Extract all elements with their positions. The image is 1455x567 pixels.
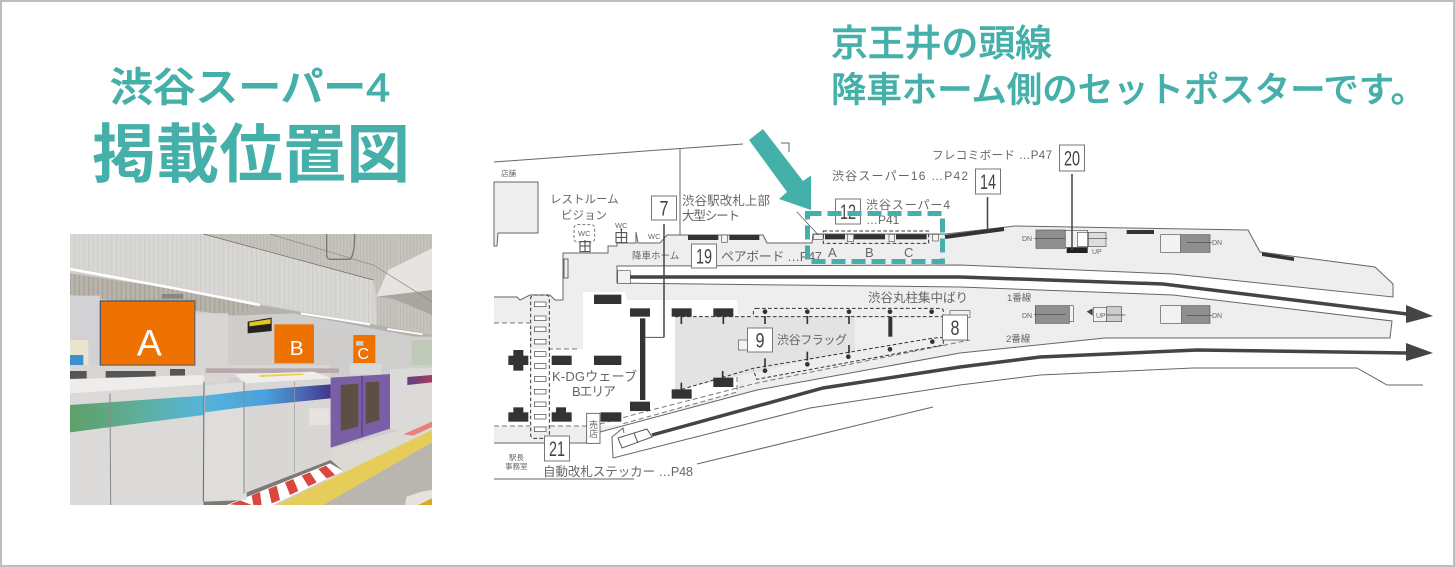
- map: text labels: 駅長: [509, 453, 524, 462]
- map: text labels: レストルーム: [550, 193, 619, 206]
- map: text labels: DN: [1022, 313, 1032, 320]
- map: text labels: DN: [1212, 240, 1222, 247]
- poster B: B: [290, 337, 304, 360]
- map: detail, lower left blocks and pillars: [508, 290, 970, 443]
- map: tracks and direction arrows: [618, 277, 1433, 448]
- map: text labels: DN: [1212, 313, 1222, 320]
- shop: [587, 413, 600, 443]
- map: text labels: 渋谷フラッグ: [777, 333, 847, 347]
- callout heading: 降車ホーム側のセットポスターです。: [831, 71, 1426, 110]
- map: text labels: K-DGウェーブ: [552, 369, 637, 384]
- map: text labels: 自動改札ステッカー …P48: [543, 464, 693, 479]
- map: text labels: WC: [578, 229, 591, 238]
- map: text labels: UP: [1096, 313, 1106, 320]
- highlight: dashed teal box: [808, 214, 942, 262]
- map: number boxes: [544, 145, 1084, 461]
- map: text labels: 渋谷駅改札上部: [682, 193, 770, 208]
- map: text labels: 大型シート: [682, 209, 740, 223]
- map: text labels: フレコミボード …P47: [932, 149, 1052, 162]
- map: text labels: A: [828, 245, 837, 260]
- map: text labels: WC: [648, 232, 661, 241]
- poster B: [274, 324, 314, 363]
- map: text labels: Bエリア: [572, 384, 616, 399]
- title: line 2: 掲載位置図: [92, 119, 410, 191]
- map: text labels: DN: [1022, 236, 1032, 243]
- arrow: pointing to poster location: [749, 129, 811, 210]
- map: number boxes: 19: [696, 246, 712, 268]
- map: text labels: 2番線: [1006, 333, 1031, 345]
- map: number boxes: 21: [549, 438, 565, 461]
- map: number boxes: 12: [840, 201, 856, 224]
- map: number boxes: 14: [980, 171, 996, 194]
- map: text labels: 1番線: [1007, 292, 1032, 304]
- poster A: [100, 300, 195, 366]
- map: text labels: …P41: [866, 213, 900, 227]
- map: text labels: 事務室: [505, 461, 528, 471]
- map: K-DG white area: [494, 292, 738, 426]
- map: text labels: 渋谷丸柱集中ばり: [868, 290, 968, 305]
- map: text labels: 降車ホーム: [632, 250, 679, 262]
- map: number boxes: 8: [950, 317, 960, 340]
- callout heading: [831, 23, 1426, 110]
- map: text labels: 渋谷スーパー16 …P42: [832, 169, 968, 183]
- map: text labels: 売: [589, 419, 598, 430]
- map: number boxes: 9: [756, 330, 764, 352]
- map: text labels: ペアボード …P47: [721, 249, 822, 264]
- map: station floor plan: [494, 143, 1433, 479]
- photo: platform with poster positions: [69, 234, 432, 505]
- map: text labels: ビジョン: [561, 209, 607, 222]
- map: platform area: [494, 226, 1393, 443]
- map: text labels: 渋谷スーパー4: [866, 198, 950, 212]
- map: detail, stairs and boards right: [1034, 230, 1294, 323]
- map: text labels: 店: [589, 429, 598, 439]
- map: text labels: 店舗: [501, 168, 516, 178]
- map: text labels: UP: [1092, 249, 1102, 256]
- map: text labels: C: [904, 245, 913, 260]
- title: line 1: 渋谷スーパー4: [110, 66, 390, 110]
- callout heading: 京王井の頭線: [831, 23, 1052, 64]
- poster C: [353, 335, 375, 363]
- poster C: C: [358, 346, 369, 363]
- map: text labels: [501, 149, 1222, 479]
- map: detail, upper left: [574, 212, 938, 283]
- map: number boxes: 7: [660, 198, 668, 220]
- map: text labels: WC: [615, 221, 628, 230]
- poster A: A: [137, 322, 162, 364]
- map: number boxes: 20: [1064, 148, 1080, 170]
- map: text labels: B: [865, 245, 874, 260]
